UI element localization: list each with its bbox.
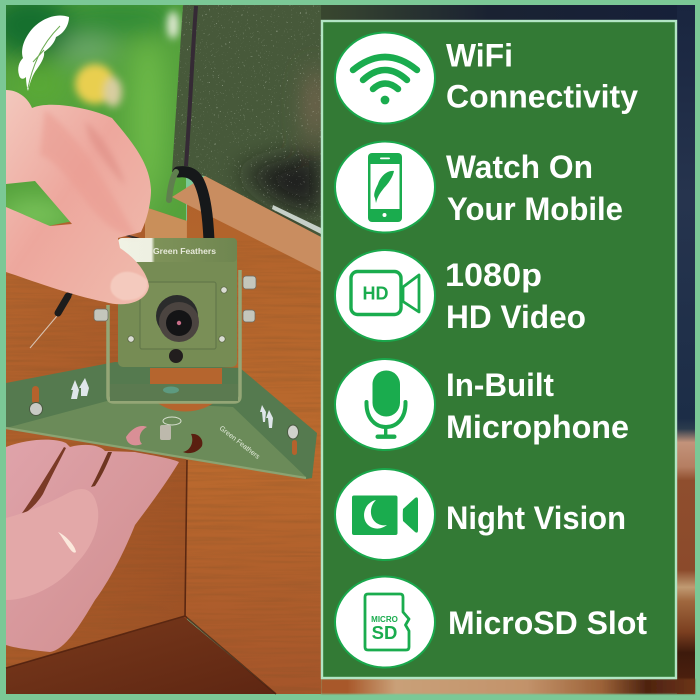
label: Watch On Your Mobile: Your Mobile xyxy=(447,191,623,227)
icon: microSD card xyxy=(365,594,409,650)
plate logo: Green Feathers xyxy=(218,425,261,461)
feature: watch on mobile xyxy=(335,142,623,232)
icon: microSD card: MICRO xyxy=(371,615,398,624)
light sensor xyxy=(169,349,183,363)
label: Night Vision: Night Vision xyxy=(446,500,626,536)
body screws xyxy=(128,287,227,342)
background strip below panel xyxy=(321,679,695,694)
feature: microSD slot xyxy=(335,576,647,668)
icon: HD camera xyxy=(351,272,419,314)
mounting bracket xyxy=(6,362,317,479)
camera label: Green Feathers xyxy=(153,247,217,256)
side bolts xyxy=(94,276,256,322)
nest box wood walls xyxy=(6,176,322,694)
lower hand xyxy=(6,440,179,652)
panel: features xyxy=(322,21,676,678)
feature: WiFi connectivity xyxy=(335,32,638,124)
wood seen through bracket xyxy=(150,368,222,412)
label: 1080p HD Video: HD Video xyxy=(446,299,586,335)
icon: microphone xyxy=(366,370,406,439)
camera body xyxy=(118,238,237,367)
icon: phone xyxy=(368,153,402,222)
background strip right of panel xyxy=(677,5,695,694)
roof panel xyxy=(172,5,324,240)
camera cradle xyxy=(108,270,240,402)
feature: night vision xyxy=(335,469,626,560)
label: In-Built Microphone: In-Built xyxy=(446,367,554,403)
icon: microSD card: SD xyxy=(372,622,397,643)
icon: HD camera: HD xyxy=(362,284,388,304)
up arrows xyxy=(71,378,273,428)
label: WiFi Connectivity: WiFi xyxy=(446,38,513,74)
garden background xyxy=(6,5,186,226)
camera cable xyxy=(169,172,209,240)
dark strip above panel xyxy=(321,5,695,21)
bracket holes xyxy=(32,386,297,455)
upper hand xyxy=(6,90,151,304)
thin wire xyxy=(30,232,143,348)
bracket screws xyxy=(30,402,298,440)
thumbnail xyxy=(110,272,148,300)
label: MicroSD Slot: MicroSD Slot xyxy=(448,605,647,641)
icon: wifi xyxy=(353,57,417,104)
feature: in-built microphone xyxy=(335,359,629,450)
feature: 1080p HD video xyxy=(335,250,586,341)
label: 1080p HD Video: 1080p xyxy=(445,257,542,293)
feather logo xyxy=(18,15,69,91)
label: WiFi Connectivity: Connectivity xyxy=(446,78,638,114)
lens xyxy=(156,295,199,342)
label: Watch On Your Mobile: Watch On xyxy=(446,149,593,185)
label: In-Built Microphone: Microphone xyxy=(446,409,629,445)
icon: night camera xyxy=(352,496,418,535)
